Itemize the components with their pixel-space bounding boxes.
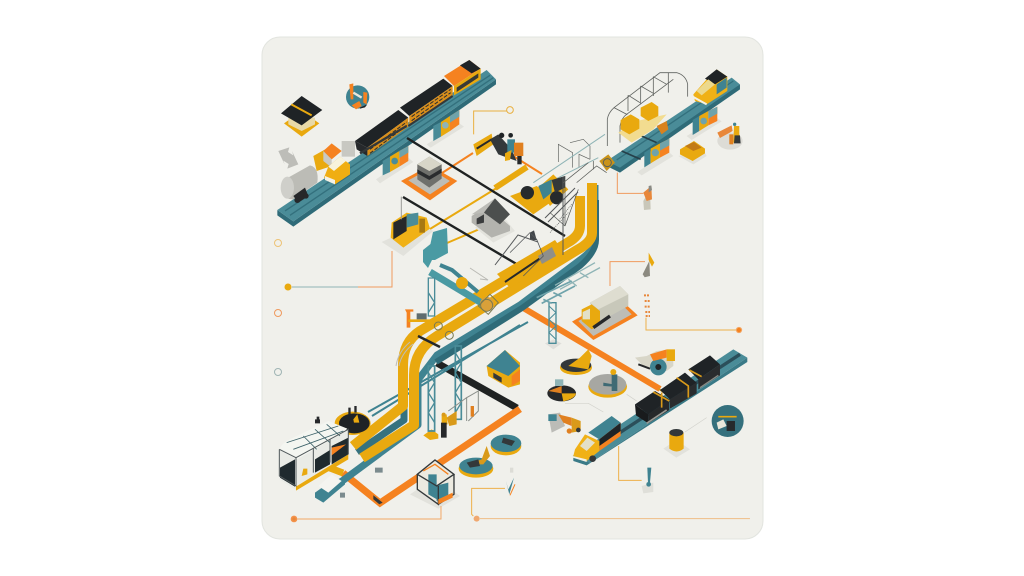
- callout: amber connector: [619, 446, 642, 480]
- icon: workers group: [473, 133, 523, 164]
- icon: worker at scaffold frame: [441, 391, 478, 438]
- icon: orange tick marks: [644, 295, 650, 316]
- disc: amber excavator: [560, 349, 592, 375]
- clamps on conveyor: [434, 294, 498, 339]
- conveyor: amber bands: [353, 183, 592, 458]
- belt: bottom right conveyor: [573, 349, 747, 465]
- container: black car three: [688, 355, 720, 389]
- gantry: upper black cable: [407, 138, 565, 236]
- machine: black wheels and yellow loader: [510, 174, 568, 214]
- main conveyor: teal underside: [330, 183, 596, 490]
- callout: left node line: [284, 251, 392, 290]
- icon: greenhouse station: [279, 417, 348, 491]
- machine: lower loader on conveyor: [497, 240, 565, 288]
- icon: small black vehicle: [293, 188, 309, 203]
- marker: left orange ring: [274, 310, 282, 316]
- icon: small loader: [548, 413, 581, 434]
- icon: orange pad building: [401, 157, 457, 200]
- lattice truss: [555, 263, 600, 289]
- panel: background card: [262, 37, 763, 539]
- icon: teal roof house: [487, 350, 520, 388]
- bottom left group: [279, 278, 750, 522]
- disc: teal amber one: [459, 446, 493, 478]
- tower: lattice column and truss: [537, 281, 575, 349]
- conveyor end cap: [373, 495, 383, 504]
- panel strip: info boards four: [687, 107, 722, 140]
- callout: gray riser: [400, 197, 403, 219]
- icon: small figure with ticks: [506, 468, 515, 495]
- icon: double arrow: [278, 147, 298, 169]
- disc: teal amber two: [491, 435, 521, 455]
- disc: dark pie: [547, 379, 576, 401]
- icon: yellow machine: [382, 213, 433, 256]
- icon: round gear on belt: [599, 154, 615, 171]
- icon: bottom mid node: [474, 516, 480, 522]
- icon: disc with dark wedge: [335, 406, 371, 435]
- icon: bottom left orange node: [291, 516, 297, 522]
- disc: gray with worker: [588, 369, 627, 398]
- gray leader lines: [565, 394, 707, 432]
- train: dark car one: [355, 110, 408, 156]
- icon: parcel truck: [572, 286, 638, 340]
- icon: yellow truck: [324, 157, 350, 184]
- icon: rooftop crane stub: [405, 309, 435, 328]
- marker: left gray ring: [274, 368, 282, 376]
- icon: dark disc badge: [712, 405, 744, 437]
- gantry: lower black cable: [403, 197, 530, 272]
- marker: left amber ring: [274, 240, 282, 246]
- callout: orange connector: [617, 173, 643, 193]
- icon: tilted tag two: [643, 253, 654, 277]
- panel strip: info boards three: [637, 139, 673, 175]
- icon: pagoda house: [281, 96, 322, 137]
- tower: top stub lattice: [428, 278, 435, 316]
- belt: top right conveyor: [510, 69, 743, 289]
- icon: worker with board: [717, 123, 743, 150]
- frame: scaffold stairs: [550, 161, 607, 233]
- frame: lower glass gantry: [533, 134, 605, 189]
- icon: delivery truck: [573, 416, 621, 462]
- icon: barrel: [663, 429, 690, 458]
- icon: exclamation figure: [642, 468, 653, 493]
- connector: thick road lines: [317, 153, 660, 503]
- callout: bottom long line: [480, 517, 750, 520]
- icon: yellow van: [693, 69, 727, 104]
- icon: orange crates: [313, 141, 355, 171]
- icon: forklift cage: [410, 460, 460, 509]
- belt: top left conveyor: [277, 60, 523, 256]
- crane: teal frame and truss: [423, 228, 494, 311]
- panel strip: info boards one: [376, 146, 413, 183]
- train: dark car two: [400, 79, 453, 126]
- scaffold: small worker: [530, 230, 537, 240]
- icon: gray house: [472, 198, 515, 243]
- icon: amber box: [678, 141, 707, 164]
- icon: tilted tag: [643, 185, 652, 210]
- frame: arch structure: [607, 73, 688, 146]
- icon: amber crates in arch: [618, 102, 668, 143]
- conveyor: black band joint: [418, 336, 440, 347]
- icon: teal pier with white pod: [315, 468, 383, 503]
- platform ladder: [510, 233, 543, 276]
- tower: left lattice: [423, 366, 438, 440]
- container: black car one: [635, 389, 672, 423]
- icon: excavator wheel: [635, 349, 675, 375]
- callout: amber right connector: [646, 318, 742, 333]
- callout: orange connector two: [610, 262, 645, 286]
- bottom right group: [537, 281, 747, 493]
- tower: right lattice: [455, 346, 461, 419]
- conveyor: curved detail: [396, 342, 413, 366]
- callout: bottom mid amber bracket: [472, 488, 505, 516]
- train: locomotive: [444, 60, 481, 95]
- icon: gray cylinder: [281, 165, 318, 199]
- callout line: top amber: [474, 107, 513, 134]
- callout: bottom left orange line: [297, 506, 441, 519]
- panel strip: info boards two: [427, 110, 464, 148]
- icon: circular badge: [346, 83, 369, 109]
- machine: upper gantry scaffold: [495, 177, 578, 265]
- container: black car two: [660, 373, 697, 409]
